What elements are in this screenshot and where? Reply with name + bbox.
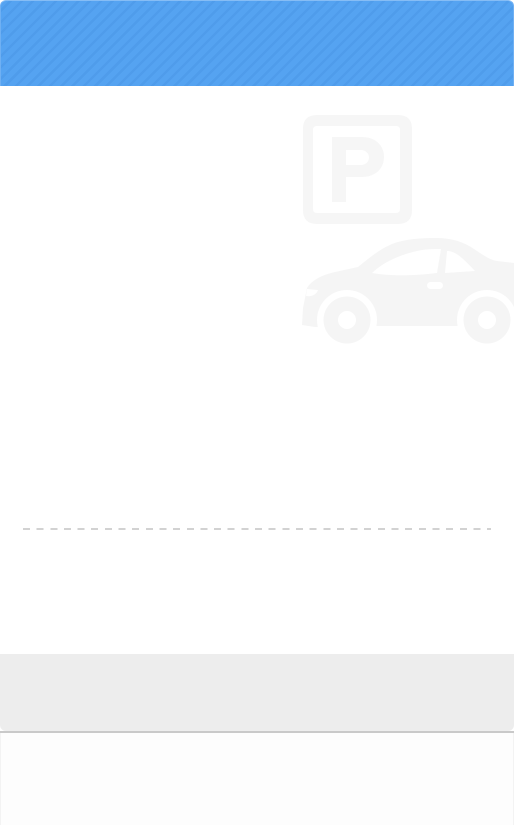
grey panel xyxy=(0,654,514,731)
car rear window xyxy=(445,251,475,273)
icon: car xyxy=(302,238,514,350)
car headlight xyxy=(306,289,318,296)
car front wheel arch xyxy=(317,290,377,350)
car window xyxy=(372,249,441,275)
footer panel xyxy=(0,733,514,825)
car rear wheel arch xyxy=(457,290,514,350)
car door handle xyxy=(427,282,443,289)
footer rule xyxy=(0,731,514,733)
dashed divider xyxy=(23,528,491,530)
icon: parking sign xyxy=(303,115,412,224)
car front wheel xyxy=(324,296,371,344)
header banner xyxy=(0,0,514,86)
car rear wheel xyxy=(464,296,511,343)
